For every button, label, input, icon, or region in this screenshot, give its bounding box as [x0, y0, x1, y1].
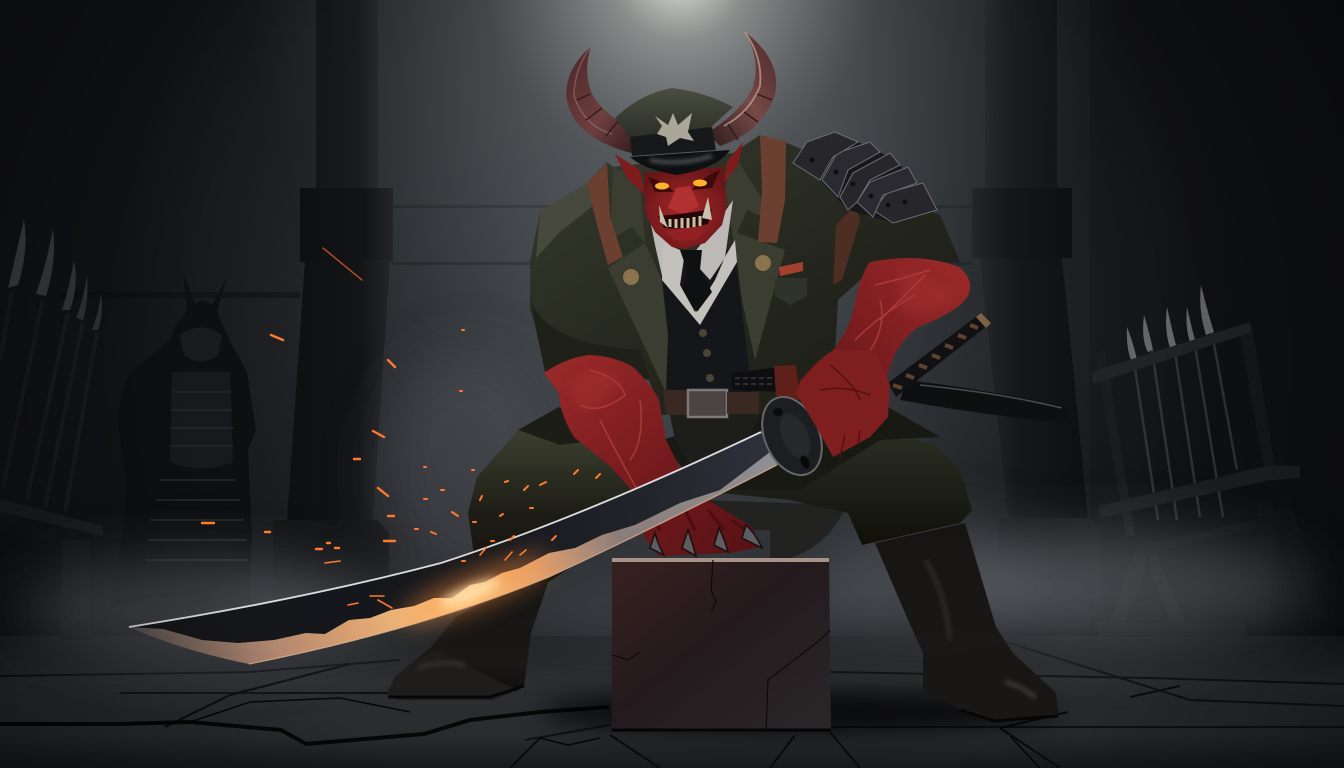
shirt collar — [645, 193, 733, 280]
sword handle and scabbard — [731, 313, 1070, 423]
sparks — [202, 248, 600, 608]
right weapon rack — [1091, 285, 1330, 637]
right stone pillar — [972, 0, 1100, 600]
left sleeve cuff — [532, 310, 646, 372]
floor — [0, 636, 1344, 768]
right arm — [796, 258, 970, 457]
belt — [663, 390, 720, 415]
blade hot glow — [394, 544, 556, 636]
left weapon rack with spears — [0, 219, 103, 640]
sword guard — [751, 388, 833, 484]
head with oni face — [615, 142, 743, 249]
left arm and clawed hand — [544, 355, 762, 556]
katana blade — [129, 432, 777, 664]
shoulder armor — [793, 132, 937, 223]
horn left — [566, 46, 644, 154]
shoulder straps — [587, 163, 623, 265]
officer cap — [615, 88, 733, 175]
coat tail behind hand — [700, 500, 846, 558]
lapels — [608, 167, 668, 393]
fist gripping sword — [796, 350, 890, 457]
shadow on floor under figure — [540, 690, 1060, 734]
habaki collar — [761, 423, 800, 465]
left leg and boot — [387, 428, 662, 700]
waistcoat — [661, 250, 752, 395]
right leg and boot — [690, 430, 1058, 722]
horn right — [707, 32, 776, 146]
samurai armor statue — [110, 272, 256, 607]
coat skirt flaps — [518, 400, 940, 490]
medals and ribbon — [623, 269, 639, 285]
light beam from above — [0, 0, 1344, 420]
fog — [20, 350, 1310, 662]
stone block — [612, 558, 831, 730]
torso jacket — [530, 135, 960, 417]
left stone pillar — [273, 0, 393, 600]
